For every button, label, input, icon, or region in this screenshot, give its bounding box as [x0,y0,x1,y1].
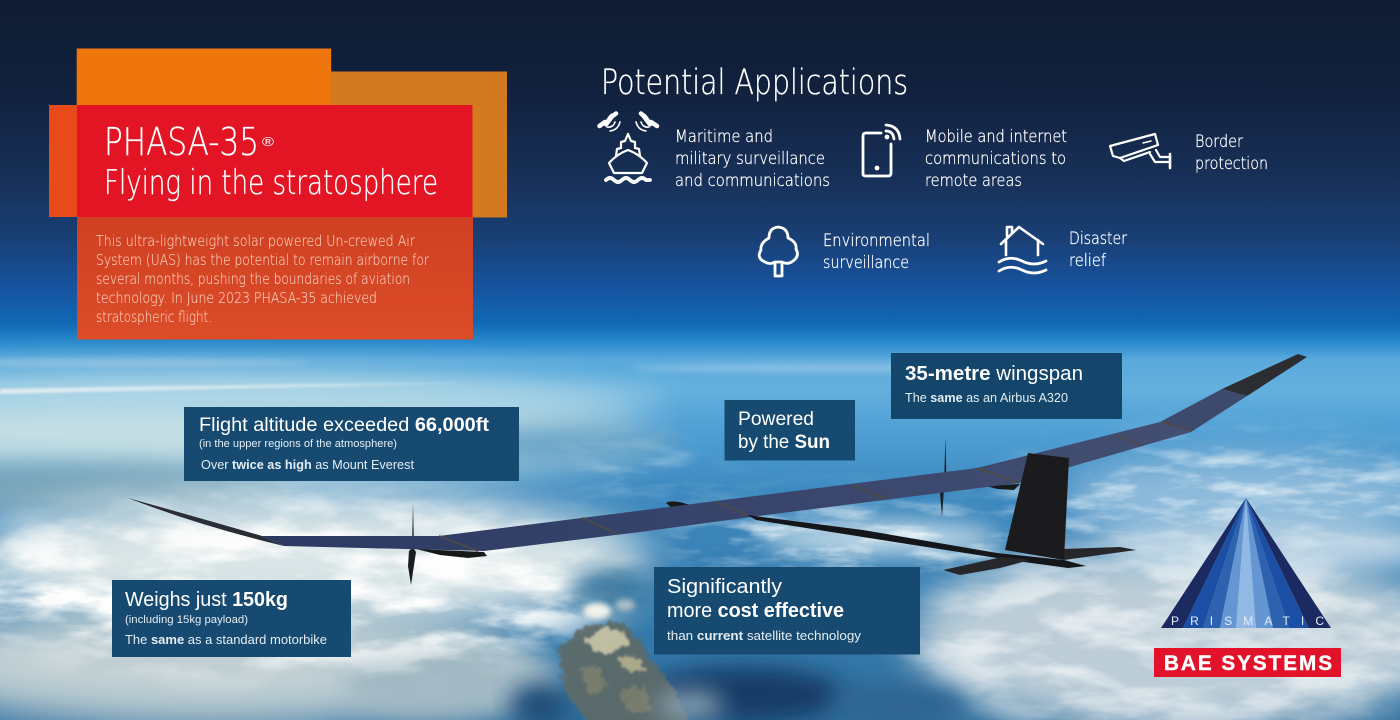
application: maritime: Maritime and [675,127,773,147]
engine pod far [985,484,1020,490]
callout: flight altitude: Over twice as high as Mount Everest [201,457,414,472]
mountains [558,599,724,720]
description panel: This ultra-lightweight solar powered Un-crewed Air [96,232,416,250]
heading [104,120,438,203]
description panel: stratospheric flight. [96,308,212,326]
main wing [262,422,1191,551]
callout: cost effective: than current satellite technology [667,628,862,643]
tail right [1062,547,1136,560]
callout: flight altitude [184,407,519,481]
callout: cost effective: more cost effective [667,600,844,622]
application: mobile: Mobile and internet [925,127,1067,147]
callout: wingspan: The same as an Airbus A320 [905,391,1068,405]
wing tip right [1222,354,1307,396]
application: border protection [1195,132,1268,174]
callout: powered by the sun [724,400,855,460]
callout: weight [112,580,351,657]
application: disaster relief [1069,229,1127,271]
application: border protection: Border [1195,132,1243,152]
callout: cost effective: Significantly [667,576,782,598]
aircraft: PHASA-35 [128,354,1307,585]
icon: flooded house [999,227,1046,273]
heading: PHASA-35 [104,120,259,164]
application: border protection: protection [1195,154,1268,174]
wing ribs [439,422,1191,551]
logo: BAE Systems: BAE SYSTEMS [1164,652,1334,675]
callout: weight: The same as a standard motorbike [125,632,327,647]
callout: flight altitude: Flight altitude exceeded 66,000ft [199,415,490,436]
application: mobile [925,127,1067,191]
icon: security camera [1110,134,1170,168]
application: environmental [823,231,930,273]
logo: Prismatic: PRISMATIC [1171,614,1324,628]
callout: powered by the sun: by the Sun [738,432,830,453]
near propeller [408,503,416,585]
icon: ship and satellites [600,114,657,182]
application: maritime: military surveillance [675,149,825,169]
heading: potential applications: Potential Applications [601,63,908,103]
application: mobile: communications to [925,149,1066,169]
application: environmental: Environmental [823,231,930,251]
engine pod nose far [666,501,690,508]
section: potential applications [600,63,1268,276]
callout: wingspan: 35-metre wingspan [905,363,1083,385]
engine pod near [416,549,487,558]
tail left [943,557,1030,575]
application: environmental: surveillance [823,253,909,273]
application: disaster relief: relief [1069,251,1106,271]
heading: Flying in the stratosphere [104,163,438,203]
application: disaster relief: Disaster [1069,229,1127,249]
heading: ® [262,134,275,149]
description panel [77,217,473,340]
dark valley [510,566,970,720]
haze left horizon [0,359,1070,516]
wing tip left [128,498,284,546]
callout: weight: (including 15kg payload) [125,614,248,626]
icon: tree [759,227,797,276]
description panel: technology. In June 2023 PHASA-35 achieved [96,289,377,307]
fuselage boom [747,515,1086,568]
logo: Prismatic [1161,498,1331,628]
callout: wingspan [891,353,1122,419]
description panel: System (UAS) has the potential to remain airborne for [96,251,430,269]
vertical fin [1005,453,1069,560]
title panel [49,48,507,340]
wing outer right [1160,389,1247,432]
icon: mobile phone [863,125,900,176]
callout: cost effective [654,567,920,654]
description panel: several months, pushing the boundaries of aviation [96,270,410,288]
application: maritime: and communications [675,171,830,191]
callout: powered by the sun: Powered [738,409,814,430]
cloud base left [0,494,650,720]
application: mobile: remote areas [925,171,1022,191]
far propeller [940,437,946,517]
cloud base right [760,454,1400,720]
application: maritime [675,127,830,191]
callout: flight altitude: (in the upper regions of the atmosphere) [199,438,397,450]
callout: weight: Weighs just 150kg [125,589,288,611]
